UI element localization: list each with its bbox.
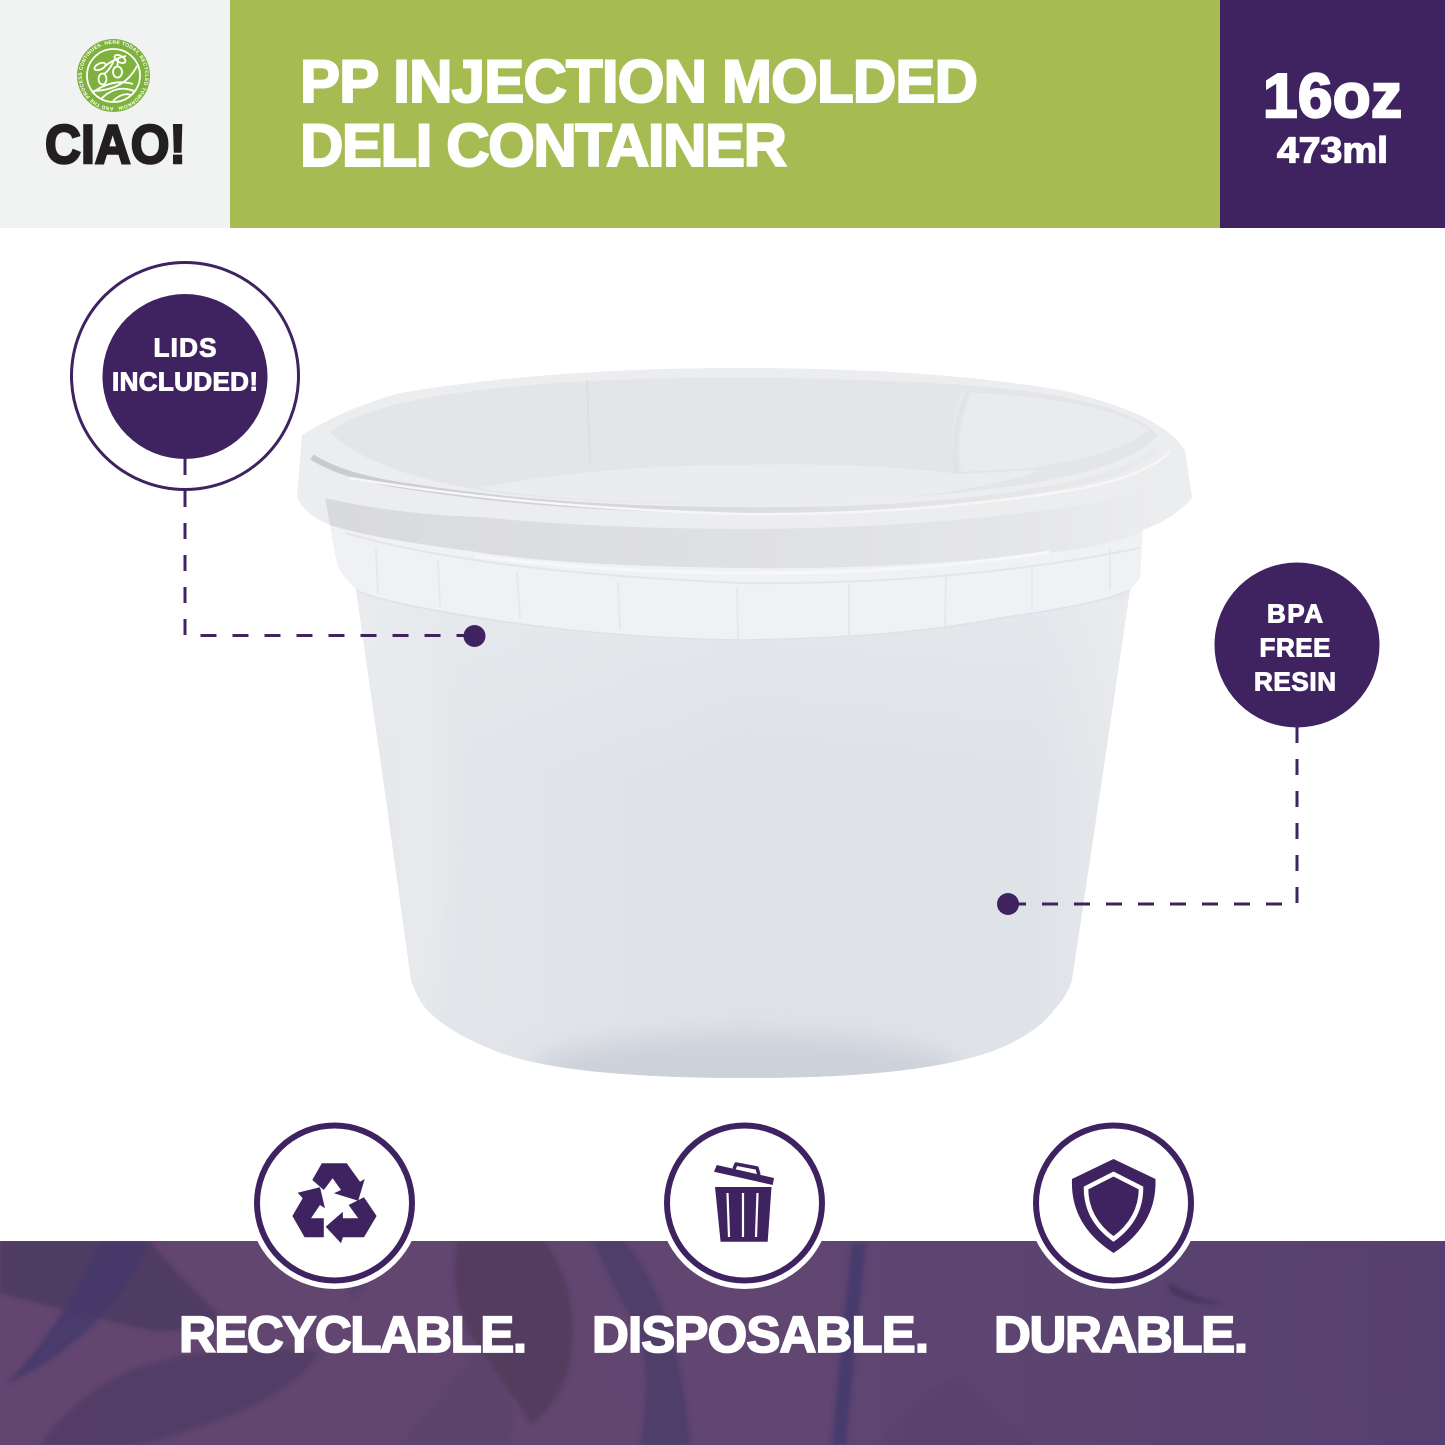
callout text: BPA [1267, 598, 1323, 628]
size text: 473ml [1277, 130, 1388, 170]
callout: lids included [72, 262, 486, 647]
icon: trash can [714, 1164, 774, 1242]
callout dot [997, 893, 1019, 915]
lid facet [952, 392, 1150, 472]
title: DELI CONTAINER [300, 112, 787, 179]
callout badge [1214, 562, 1380, 728]
callout dot [464, 625, 486, 647]
feature: recyclable [179, 1117, 527, 1363]
callout connector [1010, 727, 1297, 904]
title: PP INJECTION MOLDED [300, 48, 978, 115]
feature label: DISPOSABLE. [592, 1306, 929, 1363]
icon ring [248, 1117, 420, 1289]
icon ring [658, 1117, 830, 1289]
icon: shield [1072, 1159, 1156, 1253]
logo badge: AND THE PROCESS CONTINUES. HERE TODAY, RECYCLED TOMORROW. [78, 40, 149, 111]
lid [297, 368, 1192, 573]
bottom band [0, 1241, 1445, 1445]
feature: disposable [592, 1117, 929, 1363]
lid outer shell [297, 368, 1192, 568]
lid skirt [325, 470, 1160, 568]
callout ring [72, 262, 298, 490]
callout connector [185, 459, 470, 636]
callout text [112, 332, 258, 396]
product photo: deli container [297, 368, 1192, 1110]
header: size panel [1220, 0, 1445, 228]
container body [350, 580, 1140, 1110]
container rim band [330, 525, 1143, 640]
title [300, 48, 978, 179]
size text [1263, 62, 1402, 170]
callout text: RESIN [1254, 666, 1336, 696]
feature label: RECYCLABLE. [179, 1306, 527, 1363]
header: logo panel [0, 0, 230, 228]
feature: durable [994, 1117, 1248, 1363]
feature label: DURABLE. [994, 1306, 1248, 1363]
callout: BPA free resin [997, 562, 1380, 915]
size text: 16oz [1263, 62, 1402, 131]
callout text [1254, 598, 1336, 696]
logo wordmark: CIAO! [45, 113, 186, 175]
icon ring [1028, 1117, 1200, 1289]
lid crease [312, 450, 1155, 510]
header: title panel [230, 0, 1220, 228]
lid inner tray [330, 378, 1158, 505]
band leaf pattern [0, 1241, 1224, 1445]
icon: recycle [292, 1163, 377, 1243]
callout badge [102, 294, 268, 459]
callout text: LIDS [154, 332, 216, 362]
callout text: INCLUDED! [112, 366, 258, 396]
lid floor [480, 464, 1040, 505]
callout text: FREE [1260, 632, 1330, 662]
